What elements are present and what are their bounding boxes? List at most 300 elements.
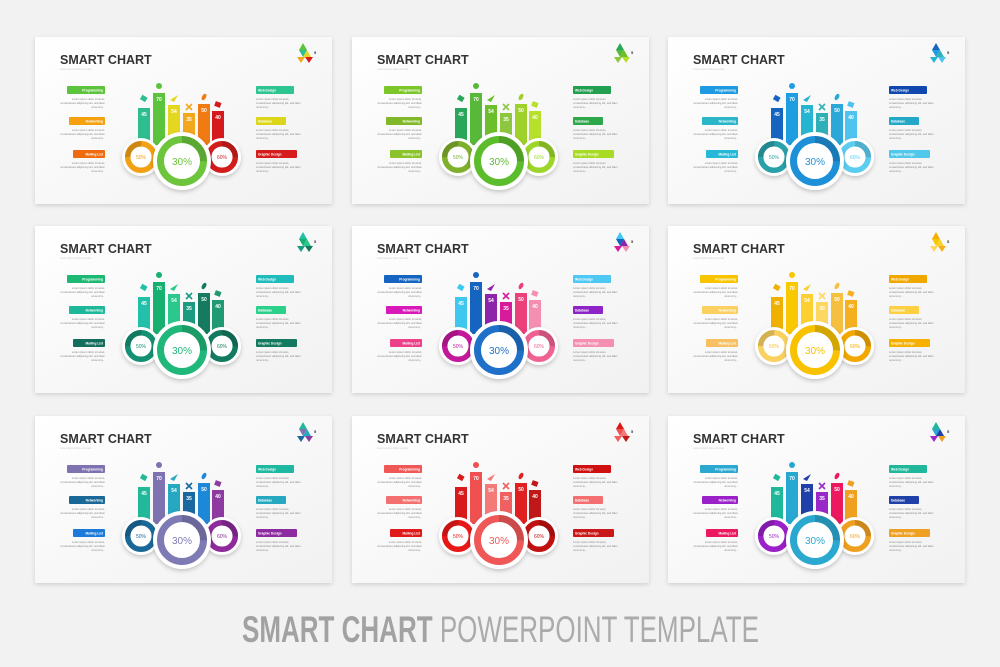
label: Mailing List bbox=[377, 529, 423, 552]
label: Graphic Design: consectetuer adipiscing elit, sed diam bbox=[256, 354, 301, 358]
label: Networking: consectetuer adipiscing elit, sed diam bbox=[377, 511, 423, 515]
label: Networking: nonummy... bbox=[91, 326, 105, 329]
label: Database bbox=[256, 306, 301, 329]
donut: 60% bbox=[203, 138, 241, 176]
bar chart: 35 bbox=[186, 117, 192, 123]
label: Mailing List bbox=[60, 529, 106, 552]
label: Programming bbox=[377, 465, 423, 488]
donut: 50% bbox=[755, 517, 793, 555]
donut: 30%: 30% bbox=[489, 346, 509, 357]
bar chart: 35 bbox=[819, 306, 825, 312]
logo bbox=[930, 422, 950, 442]
label: Graphic Design: nonummy... bbox=[573, 549, 587, 552]
label: Database: nonummy... bbox=[573, 516, 587, 519]
title: SMART CHART bbox=[377, 53, 469, 67]
label: Web Design bbox=[573, 465, 618, 488]
donut: 30% bbox=[153, 132, 211, 190]
label: Networking: nonummy... bbox=[724, 137, 738, 140]
label: Web Design: Lorem ipsum dolor sit amet, bbox=[256, 476, 289, 480]
logo: 5 bbox=[631, 429, 634, 434]
label: Graphic Design: consectetuer adipiscing elit, sed diam bbox=[573, 165, 618, 169]
label: Mailing List: Mailing List bbox=[402, 152, 421, 156]
label: Database: consectetuer adipiscing elit, sed diam bbox=[573, 132, 618, 136]
bar chart: 45 bbox=[774, 301, 780, 307]
label: Networking: Networking bbox=[719, 308, 736, 312]
label: Web Design: consectetuer adipiscing elit, sed diam bbox=[889, 480, 934, 484]
label: Networking: nonummy... bbox=[724, 516, 738, 519]
label: Database: consectetuer adipiscing elit, sed diam bbox=[256, 511, 301, 515]
label: Graphic Design: consectetuer adipiscing elit, sed diam bbox=[889, 544, 934, 548]
label: Graphic Design: Lorem ipsum dolor sit amet, bbox=[256, 161, 289, 165]
label: Networking bbox=[60, 306, 106, 329]
label: Graphic Design bbox=[573, 150, 618, 173]
label: Web Design: nonummy... bbox=[256, 485, 270, 488]
logo bbox=[930, 43, 950, 63]
bar chart: 40 bbox=[215, 115, 221, 121]
label: Graphic Design bbox=[889, 339, 934, 362]
label: Networking: Networking bbox=[86, 119, 103, 123]
donut: 50% bbox=[122, 138, 160, 176]
label: Programming bbox=[693, 275, 739, 298]
label: Networking: Lorem ipsum dolor sit amet, bbox=[389, 317, 422, 321]
bar chart: 40 bbox=[848, 494, 854, 500]
label: Web Design bbox=[573, 86, 618, 109]
label: Database: Lorem ipsum dolor sit amet, bbox=[573, 507, 606, 511]
label: Programming: consectetuer adipiscing elit, sed diam bbox=[60, 290, 106, 294]
bar chart: 50 bbox=[201, 297, 207, 303]
label: Mailing List bbox=[377, 150, 423, 173]
label: Web Design: Lorem ipsum dolor sit amet, bbox=[573, 286, 606, 290]
label: Graphic Design: Graphic Design bbox=[575, 152, 599, 156]
title: SMART CHART bbox=[377, 432, 469, 446]
label: Mailing List: Mailing List bbox=[718, 531, 737, 535]
label: Programming: Programming bbox=[715, 277, 736, 281]
donut: 50% bbox=[439, 517, 477, 555]
label: Graphic Design: consectetuer adipiscing elit, sed diam bbox=[889, 165, 934, 169]
label: Graphic Design: Lorem ipsum dolor sit amet, bbox=[889, 540, 922, 544]
label: Web Design: consectetuer adipiscing elit, sed diam bbox=[573, 290, 618, 294]
label: Database: Lorem ipsum dolor sit amet, bbox=[256, 507, 289, 511]
label: Mailing List: Lorem ipsum dolor sit amet, bbox=[72, 161, 105, 165]
label: Database: Database bbox=[891, 119, 905, 123]
label: Database: consectetuer adipiscing elit, sed diam bbox=[256, 321, 301, 325]
slide 8 bbox=[352, 416, 649, 583]
label: Programming: Lorem ipsum dolor sit amet, bbox=[705, 476, 738, 480]
logo bbox=[297, 43, 317, 63]
label: Web Design: Web Design bbox=[575, 277, 593, 281]
donut: 60%: 60% bbox=[850, 344, 861, 350]
bar chart: 40 bbox=[848, 304, 854, 310]
label: Programming: nonummy... bbox=[724, 485, 738, 488]
bar chart: 50 bbox=[518, 297, 524, 303]
label: Mailing List: nonummy... bbox=[408, 549, 422, 552]
slide 9 bbox=[668, 416, 965, 583]
label: Graphic Design bbox=[256, 529, 301, 552]
label: Web Design: Web Design bbox=[258, 277, 276, 281]
bar chart bbox=[138, 83, 224, 145]
label: Programming: Lorem ipsum dolor sit amet, bbox=[705, 97, 738, 101]
label: Web Design: Web Design bbox=[575, 467, 593, 471]
label: Programming: nonummy... bbox=[724, 106, 738, 109]
label: Networking bbox=[377, 306, 423, 329]
label: Graphic Design: nonummy... bbox=[256, 170, 270, 173]
bar chart bbox=[455, 462, 541, 524]
logo bbox=[614, 422, 634, 442]
slide 4 bbox=[35, 226, 332, 393]
label: Programming: Lorem ipsum dolor sit amet, bbox=[389, 97, 422, 101]
label: Web Design: Lorem ipsum dolor sit amet, bbox=[889, 476, 922, 480]
label: Web Design: Web Design bbox=[258, 88, 276, 92]
label: Mailing List: Lorem ipsum dolor sit amet, bbox=[72, 540, 105, 544]
label: Mailing List: nonummy... bbox=[91, 359, 105, 362]
bar chart: 35 bbox=[819, 496, 825, 502]
label: Mailing List: Mailing List bbox=[718, 152, 737, 156]
bar chart: 50 bbox=[834, 297, 840, 303]
label: Programming: nonummy... bbox=[408, 106, 422, 109]
label: Mailing List: nonummy... bbox=[91, 549, 105, 552]
label: Graphic Design: consectetuer adipiscing elit, sed diam bbox=[256, 544, 301, 548]
label: Database: Lorem ipsum dolor sit amet, bbox=[573, 128, 606, 132]
label: Programming: Lorem ipsum dolor sit amet, bbox=[72, 97, 105, 101]
label: Database: nonummy... bbox=[889, 326, 903, 329]
label: Web Design bbox=[256, 275, 301, 298]
label: Programming bbox=[377, 275, 423, 298]
bar chart bbox=[771, 272, 857, 334]
label: Programming: Programming bbox=[399, 467, 420, 471]
logo bbox=[930, 232, 950, 252]
subtitle: Lorem ipsum dolor sit amet bbox=[60, 446, 92, 450]
donut: 30% bbox=[786, 321, 844, 379]
label: Graphic Design: Graphic Design bbox=[575, 341, 599, 345]
label: Graphic Design: consectetuer adipiscing elit, sed diam bbox=[256, 165, 301, 169]
label: Database bbox=[256, 117, 301, 140]
label: Mailing List: nonummy... bbox=[408, 359, 422, 362]
label: Web Design bbox=[889, 86, 934, 109]
label: Graphic Design: nonummy... bbox=[256, 359, 270, 362]
subtitle: Lorem ipsum dolor sit amet bbox=[693, 446, 725, 450]
label: Database bbox=[889, 306, 934, 329]
label: Database bbox=[889, 117, 934, 140]
label: Mailing List: consectetuer adipiscing elit, sed diam bbox=[693, 544, 739, 548]
donut: 50% bbox=[755, 138, 793, 176]
label: Graphic Design: Lorem ipsum dolor sit amet, bbox=[256, 350, 289, 354]
label: Graphic Design: Lorem ipsum dolor sit amet, bbox=[889, 161, 922, 165]
donut: 50%: 50% bbox=[453, 155, 464, 161]
label: Networking: Lorem ipsum dolor sit amet, bbox=[389, 507, 422, 511]
label: Mailing List bbox=[60, 150, 106, 173]
label: Web Design: Lorem ipsum dolor sit amet, bbox=[573, 97, 606, 101]
label: Graphic Design: Graphic Design bbox=[575, 531, 599, 535]
label: Networking: consectetuer adipiscing elit, sed diam bbox=[693, 321, 739, 325]
bar chart: 45 bbox=[458, 112, 464, 118]
label: Programming: consectetuer adipiscing elit, sed diam bbox=[377, 101, 423, 105]
label: Graphic Design: Lorem ipsum dolor sit amet, bbox=[573, 350, 606, 354]
label: Programming: Programming bbox=[715, 467, 736, 471]
bar chart: 54 bbox=[171, 109, 177, 115]
donut: 60%: 60% bbox=[534, 344, 545, 350]
logo bbox=[614, 43, 634, 63]
label: Database: Database bbox=[575, 308, 589, 312]
label: Networking bbox=[693, 117, 739, 140]
label: Database: nonummy... bbox=[573, 326, 587, 329]
donut: 50% bbox=[755, 327, 793, 365]
label: Database: Lorem ipsum dolor sit amet, bbox=[573, 317, 606, 321]
bar chart: 70 bbox=[156, 476, 162, 482]
label: Programming: nonummy... bbox=[91, 485, 105, 488]
label: Mailing List: Mailing List bbox=[85, 152, 104, 156]
title: SMART CHART bbox=[693, 242, 785, 256]
slide 5 bbox=[352, 226, 649, 393]
label: Mailing List: Lorem ipsum dolor sit amet, bbox=[705, 161, 738, 165]
label: Graphic Design: Lorem ipsum dolor sit amet, bbox=[573, 161, 606, 165]
donut: 30%: 30% bbox=[172, 346, 192, 357]
logo: 5 bbox=[631, 50, 634, 55]
label: Programming: Lorem ipsum dolor sit amet, bbox=[389, 286, 422, 290]
label: Programming bbox=[377, 86, 423, 109]
bar chart: 35 bbox=[503, 306, 509, 312]
label: Graphic Design bbox=[889, 150, 934, 173]
label: Web Design: nonummy... bbox=[256, 106, 270, 109]
slide 6 bbox=[668, 226, 965, 393]
label: Web Design bbox=[573, 275, 618, 298]
label: Web Design: Web Design bbox=[258, 467, 276, 471]
label: Networking: Lorem ipsum dolor sit amet, bbox=[705, 128, 738, 132]
label: Programming: nonummy... bbox=[724, 295, 738, 298]
bar chart bbox=[455, 83, 541, 145]
label: Programming: Lorem ipsum dolor sit amet, bbox=[389, 476, 422, 480]
subtitle: Lorem ipsum dolor sit amet bbox=[693, 67, 725, 71]
bar chart: 45 bbox=[141, 112, 147, 118]
bar chart: 70 bbox=[156, 286, 162, 292]
label: Database: consectetuer adipiscing elit, sed diam bbox=[889, 321, 934, 325]
label: Database bbox=[573, 306, 618, 329]
label: Graphic Design: Lorem ipsum dolor sit amet, bbox=[889, 350, 922, 354]
donut: 50%: 50% bbox=[136, 534, 147, 540]
label: Database bbox=[889, 496, 934, 519]
label: Mailing List bbox=[693, 529, 739, 552]
label: Programming: consectetuer adipiscing elit, sed diam bbox=[60, 101, 106, 105]
label: Networking: consectetuer adipiscing elit, sed diam bbox=[60, 132, 106, 136]
label: Web Design: nonummy... bbox=[889, 485, 903, 488]
label: Networking: Lorem ipsum dolor sit amet, bbox=[72, 507, 105, 511]
label: Database: Database bbox=[575, 119, 589, 123]
label: Networking: consectetuer adipiscing elit, sed diam bbox=[693, 132, 739, 136]
bar chart bbox=[455, 272, 541, 334]
bar chart: 70 bbox=[156, 97, 162, 103]
label: Web Design: Lorem ipsum dolor sit amet, bbox=[573, 476, 606, 480]
label: Networking bbox=[60, 117, 106, 140]
label: Web Design: Web Design bbox=[891, 88, 909, 92]
bar chart: 35 bbox=[186, 306, 192, 312]
label: Web Design: consectetuer adipiscing elit, sed diam bbox=[573, 480, 618, 484]
bar chart: 70 bbox=[473, 286, 479, 292]
label: Mailing List bbox=[60, 339, 106, 362]
label: Networking: Lorem ipsum dolor sit amet, bbox=[705, 317, 738, 321]
label: Programming: Programming bbox=[715, 88, 736, 92]
donut: 60%: 60% bbox=[534, 534, 545, 540]
label: Database: nonummy... bbox=[256, 137, 270, 140]
label: Web Design: consectetuer adipiscing elit, sed diam bbox=[889, 101, 934, 105]
label: Graphic Design: consectetuer adipiscing elit, sed diam bbox=[573, 354, 618, 358]
label: Database bbox=[573, 496, 618, 519]
label: Programming: consectetuer adipiscing elit, sed diam bbox=[377, 290, 423, 294]
label: Networking: Lorem ipsum dolor sit amet, bbox=[389, 128, 422, 132]
label: Web Design: nonummy... bbox=[573, 485, 587, 488]
label: Networking: nonummy... bbox=[91, 516, 105, 519]
label: Database: Lorem ipsum dolor sit amet, bbox=[889, 128, 922, 132]
subtitle: Lorem ipsum dolor sit amet bbox=[693, 256, 725, 260]
bar chart: 50 bbox=[201, 487, 207, 493]
label: Web Design: Web Design bbox=[891, 467, 909, 471]
label: Networking: Networking bbox=[403, 498, 420, 502]
donut: 30% bbox=[786, 132, 844, 190]
bar chart: 54 bbox=[488, 109, 494, 115]
label: Database: Lorem ipsum dolor sit amet, bbox=[256, 317, 289, 321]
label: Networking: Networking bbox=[86, 308, 103, 312]
label: Graphic Design bbox=[256, 339, 301, 362]
label: Networking: consectetuer adipiscing elit, sed diam bbox=[377, 132, 423, 136]
label: Programming: Lorem ipsum dolor sit amet, bbox=[705, 286, 738, 290]
bar chart: 54 bbox=[804, 109, 810, 115]
donut: 30% bbox=[153, 511, 211, 569]
label: Graphic Design: nonummy... bbox=[573, 359, 587, 362]
label: Graphic Design: nonummy... bbox=[256, 549, 270, 552]
label: Database bbox=[256, 496, 301, 519]
label: Networking: consectetuer adipiscing elit, sed diam bbox=[60, 321, 106, 325]
label: Web Design: nonummy... bbox=[256, 295, 270, 298]
subtitle: Lorem ipsum dolor sit amet bbox=[60, 67, 92, 71]
bar chart: 45 bbox=[774, 112, 780, 118]
label: Mailing List: nonummy... bbox=[724, 170, 738, 173]
bar chart bbox=[138, 272, 224, 334]
label: Programming: Programming bbox=[399, 88, 420, 92]
label: Mailing List: consectetuer adipiscing elit, sed diam bbox=[60, 354, 106, 358]
label: Programming: Programming bbox=[82, 277, 103, 281]
label: Programming: Lorem ipsum dolor sit amet, bbox=[72, 476, 105, 480]
donut: 60% bbox=[203, 517, 241, 555]
label: Web Design: Lorem ipsum dolor sit amet, bbox=[889, 97, 922, 101]
label: Graphic Design: Graphic Design bbox=[258, 341, 282, 345]
label: Database: Database bbox=[258, 498, 272, 502]
bar chart: 54 bbox=[488, 488, 494, 494]
label: Networking: nonummy... bbox=[408, 326, 422, 329]
label: Networking: consectetuer adipiscing elit, sed diam bbox=[60, 511, 106, 515]
title: SMART CHART bbox=[60, 432, 152, 446]
label: Networking bbox=[377, 117, 423, 140]
donut: 50% bbox=[439, 138, 477, 176]
label: Web Design: Lorem ipsum dolor sit amet, bbox=[256, 97, 289, 101]
label: Database: consectetuer adipiscing elit, sed diam bbox=[573, 321, 618, 325]
label: Database: consectetuer adipiscing elit, sed diam bbox=[256, 132, 301, 136]
bar chart: 54 bbox=[804, 488, 810, 494]
subtitle: Lorem ipsum dolor sit amet bbox=[377, 256, 409, 260]
label: Networking bbox=[693, 496, 739, 519]
label: Mailing List: nonummy... bbox=[724, 359, 738, 362]
label: Programming: consectetuer adipiscing elit, sed diam bbox=[377, 480, 423, 484]
bar chart: 45 bbox=[141, 491, 147, 497]
label: Networking: nonummy... bbox=[724, 326, 738, 329]
logo: 5 bbox=[631, 239, 634, 244]
subtitle: Lorem ipsum dolor sit amet bbox=[377, 446, 409, 450]
bar chart: 40 bbox=[532, 304, 538, 310]
label: Programming: consectetuer adipiscing elit, sed diam bbox=[693, 480, 739, 484]
label: Networking: Networking bbox=[403, 308, 420, 312]
bar chart: 35 bbox=[186, 496, 192, 502]
label: Graphic Design: Graphic Design bbox=[258, 152, 282, 156]
label: Mailing List: consectetuer adipiscing elit, sed diam bbox=[377, 544, 423, 548]
title: SMART CHART bbox=[60, 242, 152, 256]
bar chart: 40 bbox=[215, 494, 221, 500]
bar chart: 35 bbox=[503, 496, 509, 502]
bar chart: 54 bbox=[488, 298, 494, 304]
title: SMART CHART bbox=[60, 53, 152, 67]
donut: 30% bbox=[470, 132, 528, 190]
label: Database: consectetuer adipiscing elit, sed diam bbox=[889, 511, 934, 515]
label: Database: consectetuer adipiscing elit, sed diam bbox=[573, 511, 618, 515]
bar chart bbox=[771, 462, 857, 524]
bar chart: 50 bbox=[201, 108, 207, 114]
logo: 5 bbox=[947, 239, 950, 244]
donut: 50%: 50% bbox=[453, 534, 464, 540]
label: Database: Database bbox=[891, 308, 905, 312]
donut: 30% bbox=[786, 511, 844, 569]
label: Database: Lorem ipsum dolor sit amet, bbox=[889, 507, 922, 511]
label: Database bbox=[573, 117, 618, 140]
donut: 30%: 30% bbox=[489, 157, 509, 168]
label: Programming bbox=[60, 275, 106, 298]
label: Networking: Networking bbox=[403, 119, 420, 123]
bar chart: 45 bbox=[774, 491, 780, 497]
label: Database: nonummy... bbox=[256, 326, 270, 329]
subtitle: Lorem ipsum dolor sit amet bbox=[60, 256, 92, 260]
title: SMART CHART bbox=[693, 432, 785, 446]
label: Programming: Programming bbox=[82, 88, 103, 92]
label: Graphic Design: Graphic Design bbox=[891, 341, 915, 345]
donut: 50%: 50% bbox=[453, 344, 464, 350]
label: Programming: consectetuer adipiscing elit, sed diam bbox=[693, 290, 739, 294]
label: Web Design: consectetuer adipiscing elit, sed diam bbox=[256, 101, 301, 105]
label: Web Design bbox=[889, 465, 934, 488]
slide 7 bbox=[35, 416, 332, 583]
donut: 50%: 50% bbox=[769, 155, 780, 161]
label: Networking: consectetuer adipiscing elit, sed diam bbox=[693, 511, 739, 515]
label: Mailing List: Mailing List bbox=[85, 341, 104, 345]
label: Graphic Design: Graphic Design bbox=[891, 152, 915, 156]
donut: 60%: 60% bbox=[534, 155, 545, 161]
label: Mailing List bbox=[693, 150, 739, 173]
label: Networking bbox=[60, 496, 106, 519]
footer title: SMART CHART POWERPOINT TEMPLATE bbox=[242, 609, 759, 650]
donut: 50%: 50% bbox=[136, 155, 147, 161]
label: Web Design: consectetuer adipiscing elit, sed diam bbox=[256, 480, 301, 484]
label: Programming bbox=[60, 86, 106, 109]
label: Graphic Design: Lorem ipsum dolor sit amet, bbox=[573, 540, 606, 544]
donut: 60% bbox=[203, 327, 241, 365]
slide 1 bbox=[35, 37, 332, 204]
label: Database: Database bbox=[891, 498, 905, 502]
bar chart: 70 bbox=[789, 286, 795, 292]
bar chart: 50 bbox=[518, 487, 524, 493]
label: Mailing List: Mailing List bbox=[402, 341, 421, 345]
donut: 60% bbox=[520, 517, 558, 555]
title: SMART CHART bbox=[693, 53, 785, 67]
label: Database: Database bbox=[575, 498, 589, 502]
label: Mailing List: consectetuer adipiscing elit, sed diam bbox=[377, 165, 423, 169]
bar chart bbox=[771, 83, 857, 145]
label: Web Design: Web Design bbox=[891, 277, 909, 281]
bar chart: 54 bbox=[804, 298, 810, 304]
donut: 60% bbox=[520, 138, 558, 176]
